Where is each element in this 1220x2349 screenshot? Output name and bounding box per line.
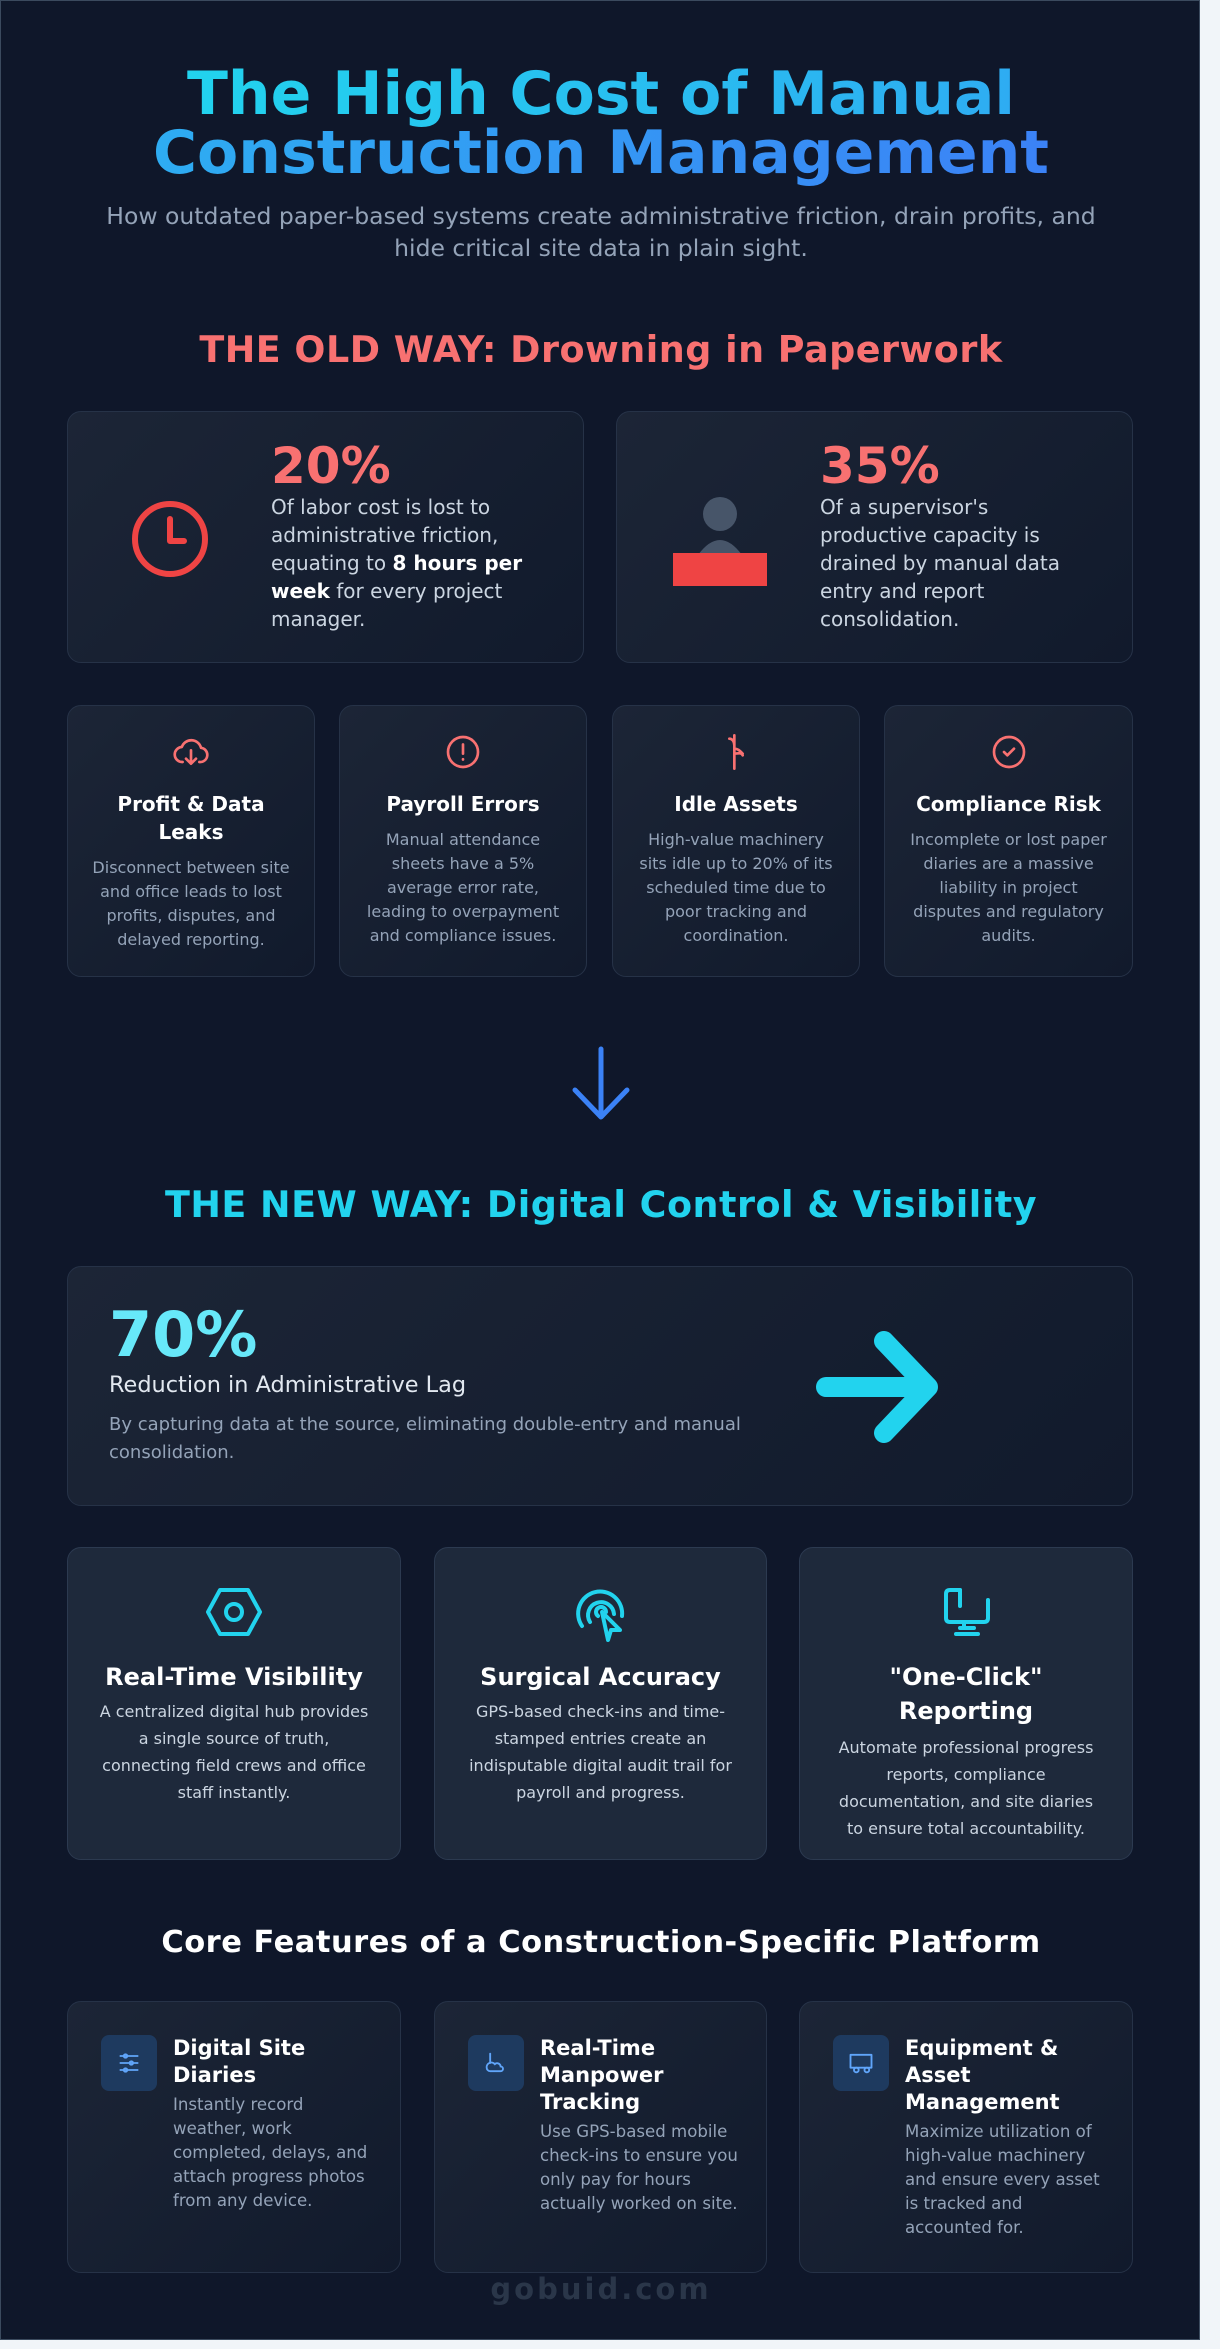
heading: new way: THE NEW WAY: Digital Control & Visibility <box>165 1183 1037 1226</box>
feature text <box>173 2036 367 2210</box>
stat card: 20% <box>67 411 584 663</box>
benefit card: visibility <box>67 1547 401 1860</box>
icon: check circle <box>992 736 1026 768</box>
card: compliance risk: Incomplete or lost paper diaries are a massive liability in project disputes and regulatory audits. <box>910 830 1107 945</box>
subtitle: How outdated paper-based systems create administrative friction, drain profits, and hide critical site data in plain sight. <box>106 202 1096 262</box>
stat text: Of a supervisor's productive capacity is drained by manual data entry and report consolidation. <box>820 495 1060 631</box>
stat card: 35% <box>616 411 1133 663</box>
card: profit leaks: Disconnect between site and office leads to lost profits, disputes, and delayed reporting. <box>92 858 290 949</box>
feature text <box>540 2036 738 2213</box>
title: Construction Management <box>153 118 1049 188</box>
benefit card: visibility: Real-Time Visibility <box>105 1663 363 1691</box>
feature card: equipment <box>799 2001 1133 2273</box>
card: profit leaks <box>67 705 315 977</box>
icon: arrow right <box>816 1331 938 1443</box>
icon: cloud download <box>173 738 209 766</box>
benefit card: accuracy: GPS-based check-ins and time-stamped entries create an indisputable digital audit trail for payroll and progress. <box>469 1702 732 1802</box>
feature text: Use GPS-based mobile check-ins to ensure you only pay for hours actually worked on site. <box>540 2122 738 2213</box>
benefit card: visibility: A centralized digital hub provides a single source of truth, connecting field crews and office staff instantly. <box>100 1702 368 1802</box>
card: compliance risk <box>884 705 1133 977</box>
icon: fingerprint cursor <box>576 1590 624 1642</box>
feature card: manpower <box>434 2001 767 2273</box>
icon: sliders <box>101 2035 157 2091</box>
icon: idle <box>728 734 744 770</box>
card: compliance risk: Compliance Risk <box>916 792 1101 816</box>
card: payroll errors: Manual attendance sheets have a 5% average error rate, leading to overpayment and compliance issues. <box>367 830 559 945</box>
feature text: Real-Time Manpower Tracking <box>540 2036 663 2114</box>
stat text <box>271 437 522 631</box>
watermark: gobuid.com <box>490 2272 712 2306</box>
hero text: 70% <box>109 1298 257 1371</box>
feature text <box>905 2036 1100 2237</box>
feature text: Instantly record weather, work completed, delays, and attach progress photos from any device. <box>173 2095 367 2210</box>
card: idle assets: Idle Assets <box>674 792 798 816</box>
stat text: Of labor cost is lost to administrative friction, equating to 8 hours per week for every project manager. <box>271 495 522 631</box>
heading: old way: THE OLD WAY: Drowning in Paperwork <box>199 328 1003 371</box>
benefit card: accuracy <box>434 1547 767 1860</box>
card: idle assets: High-value machinery sits idle up to 20% of its scheduled time due to poor tracking and coordination. <box>639 830 833 945</box>
title <box>153 59 1049 188</box>
card: profit leaks: Profit & Data Leaks <box>117 792 265 844</box>
benefit card: accuracy: Surgical Accuracy <box>480 1663 721 1691</box>
card: idle assets <box>612 705 860 977</box>
benefit card: reporting: "One-Click" Reporting <box>890 1663 1042 1725</box>
icon: truck <box>833 2035 889 2091</box>
feature text: Maximize utilization of high-value machinery and ensure every asset is tracked and accounted for. <box>905 2122 1100 2237</box>
icon: monitor <box>944 1588 990 1636</box>
icon: hexagon <box>206 1588 262 1636</box>
card: payroll errors: Payroll Errors <box>386 792 540 816</box>
arrow: down <box>572 1046 630 1120</box>
hero card: 70% <box>67 1266 1133 1506</box>
icon: hand <box>468 2035 524 2091</box>
feature text: Digital Site Diaries <box>173 2036 305 2087</box>
stat text: 35% <box>820 437 940 495</box>
card: payroll errors <box>339 705 587 977</box>
icon: supervisor <box>673 497 767 586</box>
feature card: site diaries <box>67 2001 401 2273</box>
stat text: 20% <box>271 437 391 495</box>
icon: clock <box>132 501 208 577</box>
feature text: Equipment & Asset Management <box>905 2036 1060 2114</box>
benefit card: reporting: Automate professional progress reports, compliance documentation, and site diaries to ensure total accountability. <box>839 1738 1093 1838</box>
hero text <box>109 1298 741 1463</box>
hero text: By capturing data at the source, eliminating double-entry and manual consolidation. <box>109 1414 741 1463</box>
hero text: Reduction in Administrative Lag <box>109 1372 466 1398</box>
icon: alert <box>446 736 480 768</box>
title: The High Cost of Manual <box>187 59 1015 129</box>
benefit card: reporting <box>799 1547 1133 1860</box>
heading: core features: Core Features of a Construction-Specific Platform <box>161 1925 1041 1960</box>
